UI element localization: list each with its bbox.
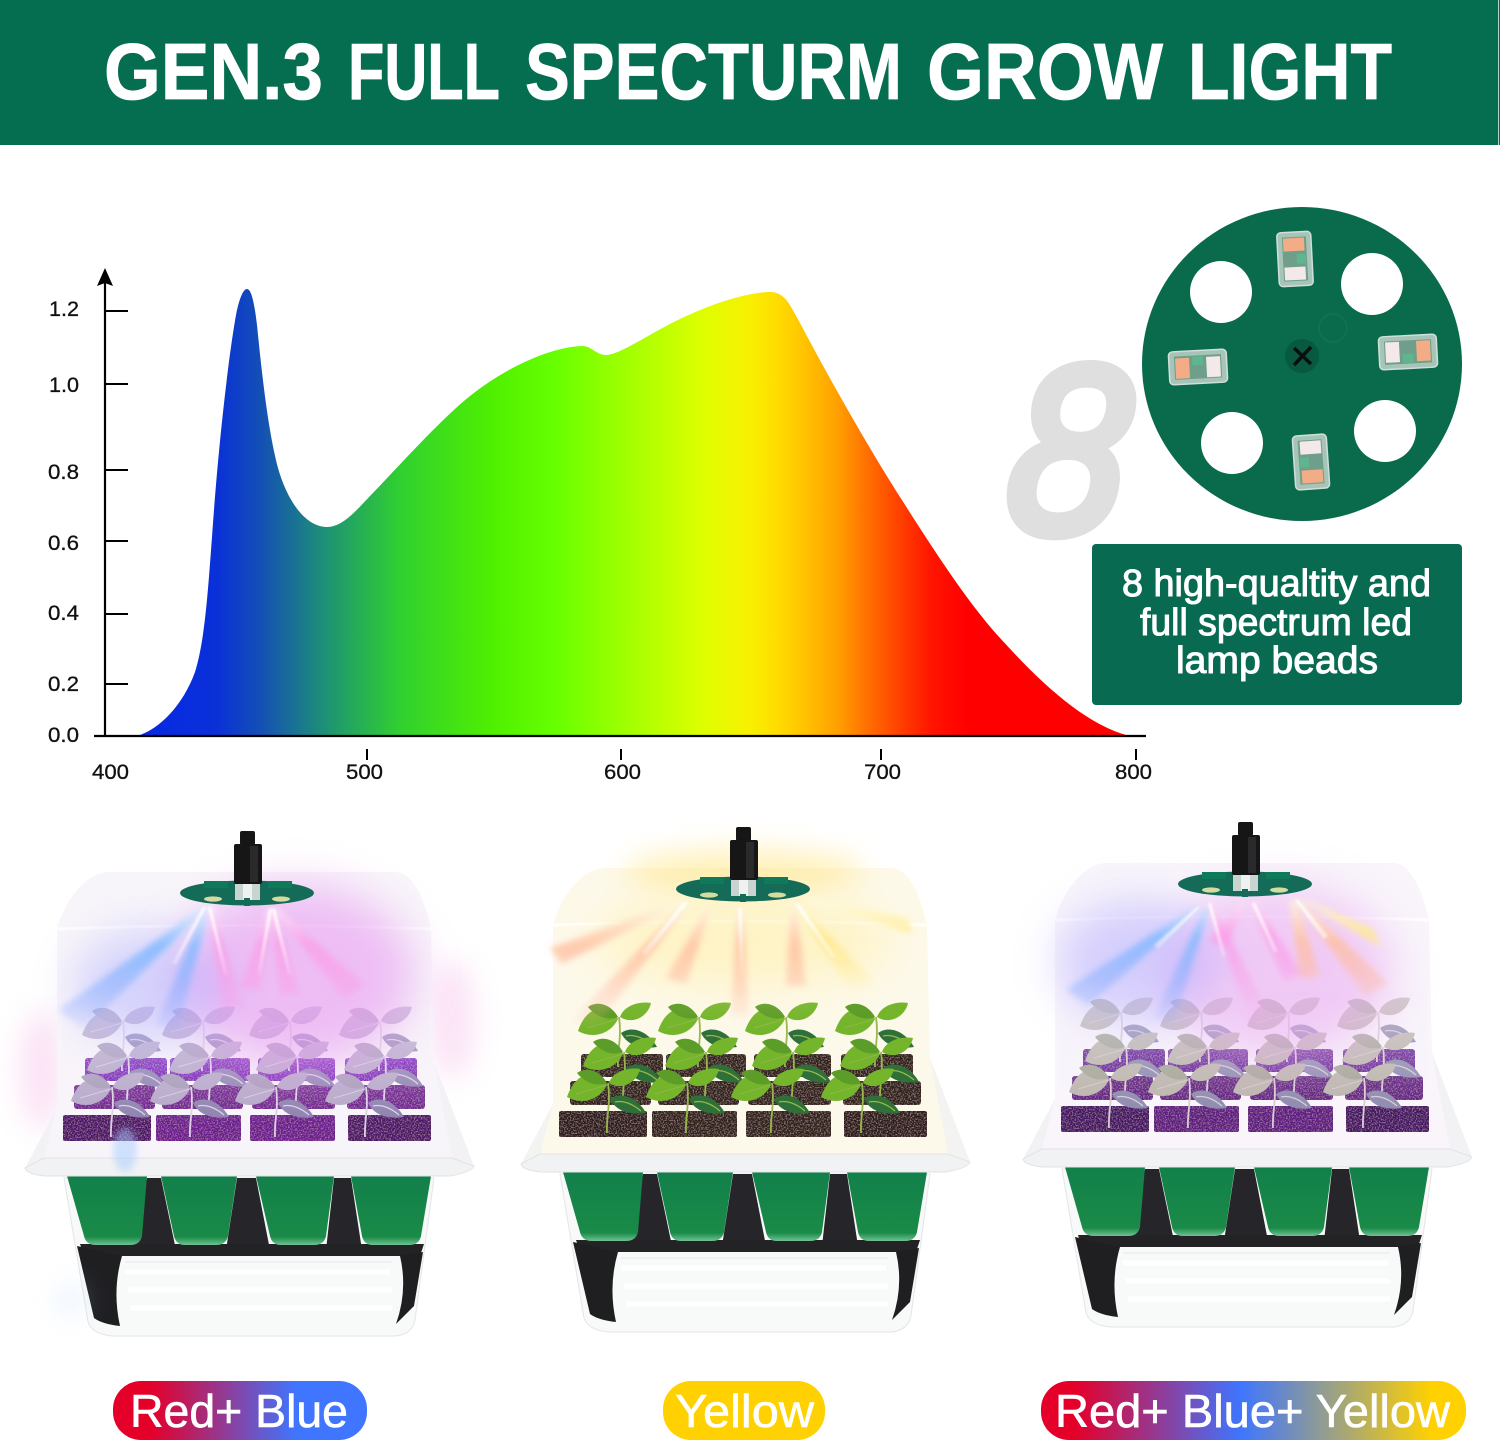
spectrum chart [48, 268, 1152, 784]
lamp fixture [676, 827, 810, 902]
y axis labels: 1.2 [49, 298, 79, 321]
lower tray and pots [560, 1172, 930, 1332]
title banner [0, 0, 1500, 145]
y axis with arrow [97, 268, 128, 736]
y axis labels: 0.2 [48, 673, 79, 696]
x axis [94, 736, 1146, 760]
side glow [20, 960, 474, 1130]
spectrum curve area [137, 289, 1130, 736]
soil cells [1061, 1049, 1429, 1132]
lamp fixture [180, 831, 314, 906]
seedlings [71, 1007, 423, 1137]
caption box: full spectrum led [1140, 602, 1412, 644]
y axis labels: 1.0 [49, 374, 79, 397]
x axis labels: 400 [92, 761, 129, 784]
seedlings [1069, 998, 1421, 1128]
title banner: GEN.3 [104, 27, 323, 116]
centre hub [1285, 314, 1347, 373]
lower tray and pots [1062, 1167, 1432, 1327]
LED beads [1168, 231, 1438, 490]
title banner: SPECTURM [525, 27, 902, 116]
LED disc [1142, 207, 1462, 521]
label: red + blue: Red+ Blue [130, 1385, 348, 1437]
x axis labels: 800 [1115, 761, 1152, 784]
y axis labels: 0.0 [48, 724, 79, 747]
panel: yellow seed tray [521, 827, 970, 1332]
humidity dome [25, 872, 474, 1176]
dome haze [62, 1000, 430, 1120]
y axis labels [48, 298, 79, 747]
caption box: 8 high-qualtity and [1122, 563, 1431, 605]
light rays [56, 885, 415, 1314]
lamp fixture [1178, 822, 1312, 897]
dome haze [1060, 991, 1428, 1111]
label: red + blue + yellow: Red+ Blue+ Yellow [1055, 1385, 1451, 1437]
caption box: lamp beads [1176, 640, 1378, 682]
lower tray and pots [64, 1176, 434, 1336]
y axis labels: 0.6 [48, 532, 79, 555]
mounting holes [1190, 253, 1416, 474]
soil cells [63, 1058, 431, 1141]
humidity dome [1023, 863, 1472, 1167]
y axis labels: 0.8 [48, 461, 79, 484]
label: yellow: Yellow [675, 1385, 815, 1437]
title banner: LIGHT [1188, 27, 1392, 116]
x axis labels: 600 [604, 761, 641, 784]
light rays [550, 849, 912, 1031]
x axis labels: 700 [864, 761, 901, 784]
caption box [1092, 544, 1462, 705]
x axis labels: 500 [346, 761, 383, 784]
seedlings [567, 1003, 919, 1133]
big number 8: 8 [999, 316, 1140, 583]
title banner: GROW [927, 27, 1163, 116]
panel: red + blue + yellow seed tray [1023, 822, 1472, 1327]
humidity dome [521, 868, 970, 1172]
y axis labels: 0.4 [48, 602, 79, 625]
title banner: FULL [348, 27, 500, 116]
light rays [1058, 886, 1393, 1056]
soil cells [559, 1054, 927, 1137]
x axis labels [92, 761, 1152, 784]
panel: red + blue seed tray [20, 831, 474, 1336]
